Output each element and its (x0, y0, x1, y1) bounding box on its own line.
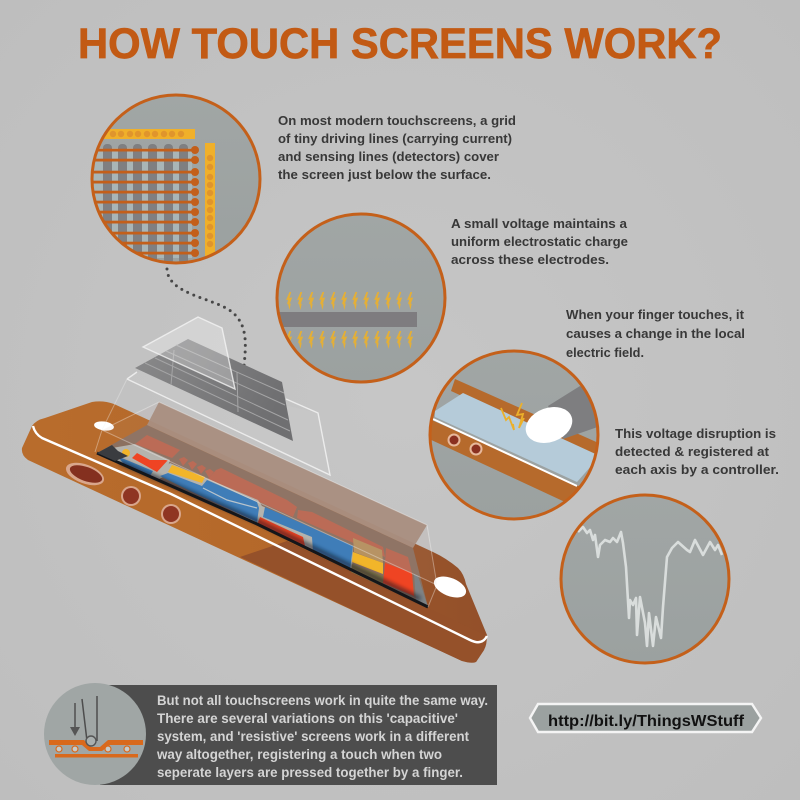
phone white edge highlight (33, 426, 487, 642)
phone illustration (22, 317, 487, 663)
icon: resistive touch circle (44, 683, 146, 785)
text block: driving and sensing lines: of tiny driving lines (carrying current) (278, 131, 512, 146)
text block: controller: detected & registered at (615, 444, 770, 459)
text block: controller (615, 426, 779, 477)
text block: finger touch: When your finger touches, it (566, 307, 745, 322)
text block: small voltage: across these electrodes. (451, 252, 609, 267)
panel text (156, 693, 488, 780)
panel text: system, and 'resistive' screens work in a different (157, 729, 469, 744)
phone speaker slot (63, 458, 107, 490)
url badge (530, 704, 761, 732)
circle: electrode grid (88, 95, 260, 264)
middle transparent layer (102, 371, 330, 475)
screen well (97, 425, 428, 607)
text block: small voltage: A small voltage maintains a (451, 216, 628, 231)
text block: driving and sensing lines: On most modern touchscreens, a grid (278, 113, 516, 128)
phone body (22, 401, 487, 663)
panel text: But not all touchscreens work in quite the same way. (157, 693, 488, 708)
sensor grid layer (135, 339, 293, 441)
text block: finger touch (566, 307, 745, 360)
text block: driving and sensing lines: the screen just below the surface. (278, 167, 491, 182)
text block: small voltage (451, 216, 628, 267)
panel text: seperate layers are pressed together by a finger. (157, 765, 463, 780)
circle: electrostatic charge (270, 214, 445, 382)
phone bottom hole (431, 572, 469, 602)
phone shadowed lower section (240, 541, 487, 662)
glass cover layer (95, 402, 437, 607)
url badge: http://bit.ly/ThingsWStuff (548, 713, 745, 730)
panel text: way altogether, registering a touch when two (156, 747, 442, 762)
phone button one (121, 486, 141, 506)
text block: controller: each axis by a controller. (615, 462, 779, 477)
text block: finger touch: electric field. (566, 345, 644, 360)
dotted connector line (167, 269, 245, 366)
bottom panel: resistive touchscreens (44, 683, 497, 785)
text block: small voltage: uniform electrostatic charge (451, 234, 628, 249)
text block: driving and sensing lines (278, 113, 516, 182)
text block: controller: This voltage disruption is (615, 426, 776, 441)
text block: driving and sensing lines: and sensing lines (detectors) cover (278, 149, 499, 164)
top transparent layer (143, 317, 235, 389)
title: HOW TOUCH SCREENS WORK? (78, 20, 722, 68)
panel text: There are several variations on this 'capacitive' (157, 711, 458, 726)
circle: finger touching screen (425, 351, 612, 519)
phone top hole (93, 420, 115, 432)
circle: voltage signal graph (561, 495, 729, 663)
text block: finger touch: causes a change in the local (566, 326, 745, 341)
phone button two (161, 504, 181, 524)
panel background (100, 685, 497, 785)
